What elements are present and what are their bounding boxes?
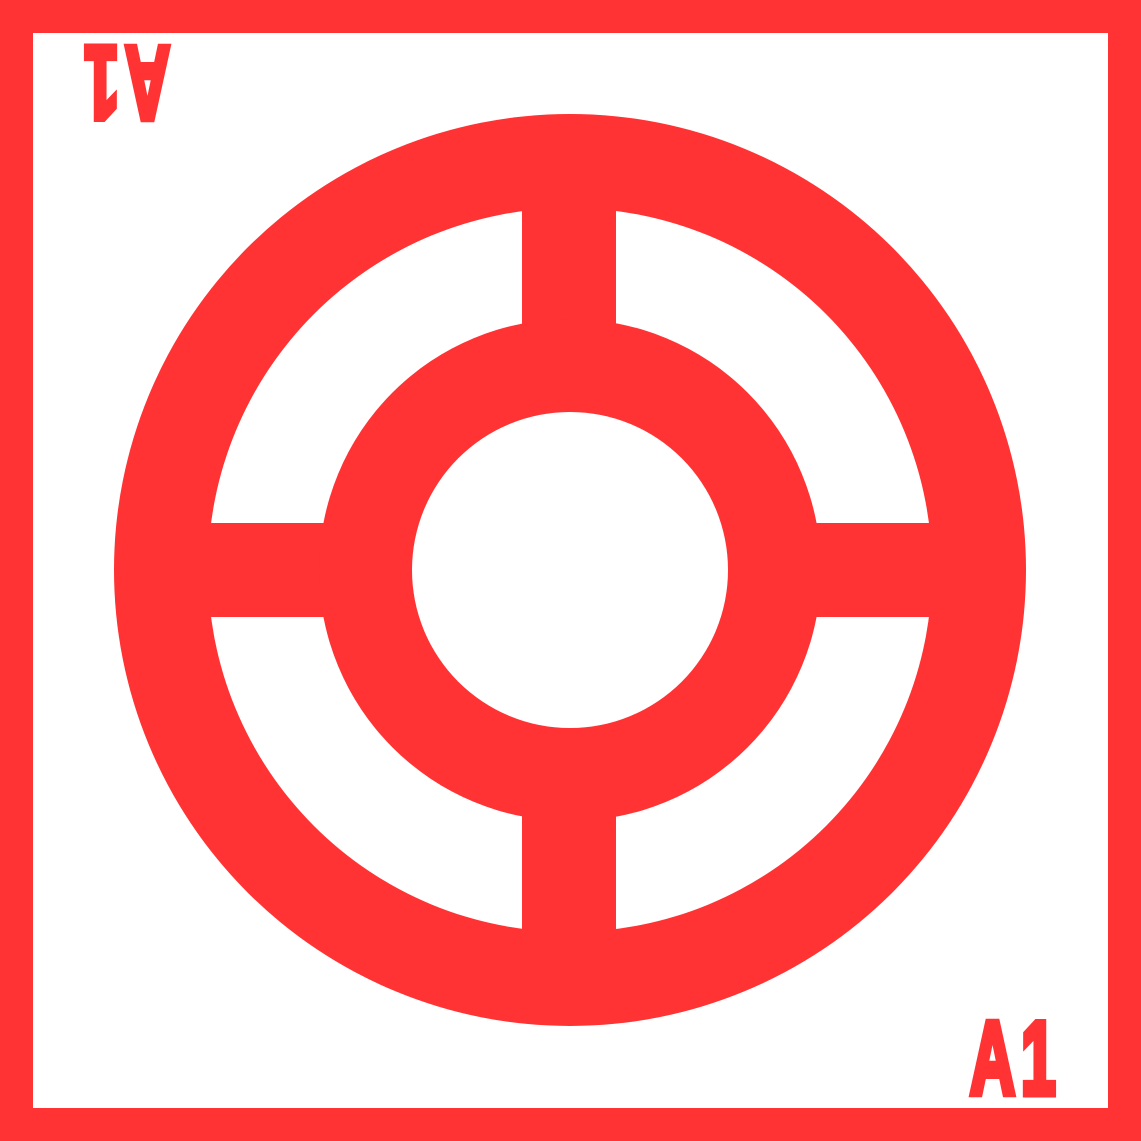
ring target icon (114, 114, 1026, 1026)
label: A1 top left rotated: A1 (78, 24, 170, 140)
label: A1 bottom right: A1 (970, 1001, 1062, 1117)
